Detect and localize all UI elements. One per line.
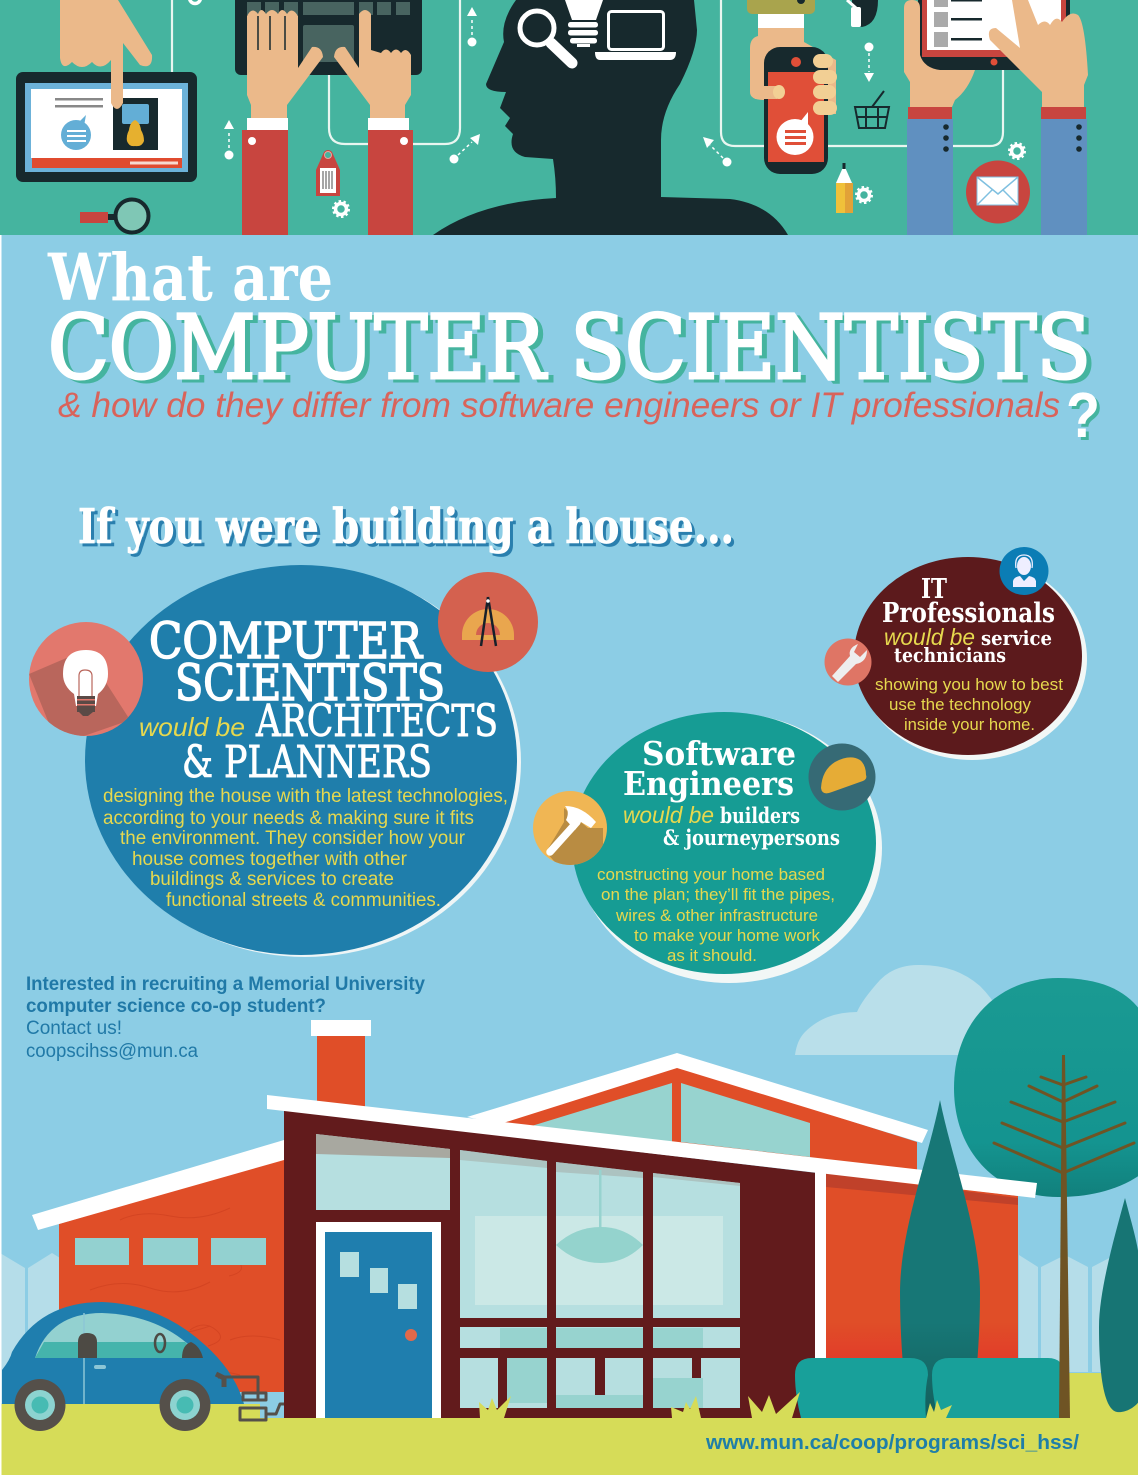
icon: wrench — [824, 638, 872, 686]
heading: computer scientists: SCIENTISTS — [175, 654, 445, 712]
icon: shopping basket — [855, 91, 889, 128]
text: description: the environment. They consider how your — [120, 828, 466, 849]
text: description — [103, 786, 508, 911]
contact block: coopscihss@mun.ca — [26, 1041, 198, 1062]
heading: computer scientists: COMPUTER — [149, 612, 423, 670]
panel: computer scientists — [29, 565, 538, 957]
text: description: designing the house with the latest technologies, — [103, 786, 508, 807]
heading: computer scientists — [149, 612, 445, 712]
text: description: to make your home work — [634, 926, 820, 945]
text: description: according to your needs & making sure it fits — [103, 808, 474, 829]
icon: typing hands and red sleeves — [242, 10, 413, 235]
right wing wall — [820, 1172, 1018, 1372]
main roof — [267, 1095, 1037, 1198]
chimney — [311, 1020, 371, 1114]
text: description — [875, 675, 1063, 734]
house — [32, 1020, 1037, 1418]
icon: tablet hands and blue sleeves — [904, 0, 1088, 235]
text: would be service technicians: service — [981, 626, 1052, 650]
icon: magnifying glass — [80, 200, 148, 232]
icon: gear by envelope — [1009, 143, 1025, 159]
icon: support agent — [1000, 547, 1048, 595]
garage wing — [32, 1140, 290, 1392]
round tree — [954, 978, 1140, 1197]
icon: pencil — [836, 163, 853, 213]
car — [2, 1302, 244, 1431]
contact block: computer science co-op student? — [26, 996, 326, 1017]
wheels — [14, 1379, 210, 1431]
pendant lamp — [556, 1170, 643, 1263]
dashed arrows — [224, 7, 874, 166]
icon: gear top — [190, 0, 200, 4]
charging cable — [216, 1374, 284, 1420]
cypress trees — [900, 1100, 1140, 1418]
url: www.mun.ca/coop/programs/sci_hss/ — [705, 1432, 1079, 1454]
text: description: showing you how to best — [875, 675, 1063, 694]
title — [47, 240, 1103, 454]
heading: software engineers: Engineers — [623, 764, 794, 803]
bare tree — [994, 1055, 1134, 1418]
question mark: ? — [1069, 382, 1103, 454]
heading: if you were building a house: If you were building a house... — [81, 502, 737, 558]
text: description: wires & other infrastructure — [615, 906, 818, 925]
ground — [0, 1373, 1140, 1475]
text: would be builders: builders — [720, 803, 800, 828]
text: description: functional streets & communities. — [166, 890, 441, 911]
heading: if you were building a house: If you were building a house... — [78, 499, 734, 555]
text: would be architects and planners: & PLANNERS — [182, 737, 432, 788]
heading: IT professionals: Professionals — [882, 598, 1055, 629]
transom window — [316, 1134, 450, 1210]
icon: hand holding phone — [747, 0, 837, 174]
icon: right tablet — [918, 0, 1070, 70]
icon: head silhouette — [433, 0, 788, 235]
icon: price tag — [316, 150, 340, 196]
grass tufts — [479, 1392, 952, 1418]
heading: IT professionals — [882, 574, 1055, 629]
icon: hard hat — [808, 744, 876, 810]
text: would be architects and planners: ARCHITECTS — [255, 696, 498, 747]
panel: software engineers — [533, 712, 882, 983]
heading: IT professionals: IT — [921, 574, 947, 605]
icon: hammer — [533, 791, 607, 868]
hedges — [795, 1358, 1064, 1418]
icon: light bulb — [29, 622, 143, 736]
text: description: on the plan; they’ll fit the pipes, — [601, 885, 835, 904]
icon: gear — [333, 201, 349, 217]
question mark: ? — [1066, 379, 1100, 451]
text: description: constructing your home based — [597, 865, 825, 884]
icon: left tablet — [16, 72, 197, 182]
heading: software engineers — [623, 734, 796, 803]
main dark block — [284, 1110, 817, 1418]
text: would be architects and planners: would be — [139, 712, 245, 742]
title: what are: What are — [47, 240, 333, 316]
subtitle: & how do they differ from software engineers or IT professionals — [58, 386, 1060, 425]
text: description: inside your home. — [904, 715, 1035, 734]
icon: gear by pencil — [856, 187, 872, 203]
contact block: Contact us! — [26, 1018, 122, 1039]
circuit lines — [172, 0, 1003, 146]
icon: idea symbols in head — [520, 0, 676, 63]
text: description — [597, 865, 835, 965]
panel: IT professionals — [824, 547, 1087, 760]
icon: telephone handset — [847, 0, 878, 27]
text: description: house comes together with other — [132, 849, 408, 870]
fences — [0, 1253, 1138, 1403]
cloud — [795, 965, 998, 1055]
icon: envelope — [966, 160, 1030, 224]
text: description: as it should. — [667, 946, 757, 965]
text: would be builders: & journeypersons — [663, 825, 840, 850]
white post — [815, 1172, 826, 1362]
contact block: Interested in recruiting a Memorial University — [26, 974, 425, 995]
text: description: use the technology — [889, 695, 1031, 714]
text: description: buildings & services to create — [150, 869, 394, 890]
text: would be builders — [623, 802, 840, 850]
rear gable — [467, 1053, 928, 1175]
text: would be service technicians — [884, 624, 1052, 667]
top illustration banner — [0, 0, 1140, 235]
contact block — [26, 974, 425, 1062]
icon: keyboard — [235, 0, 422, 75]
text: would be service technicians: would be — [884, 624, 975, 650]
heading: software engineers: Software — [642, 734, 796, 773]
text: would be architects and planners — [139, 696, 498, 788]
text: would be builders: would be — [623, 802, 714, 828]
picture windows — [460, 1150, 740, 1408]
icon: pointing hand — [60, 0, 152, 109]
text: would be service technicians: technicians — [894, 643, 1006, 667]
icon: compass and protractor — [438, 572, 538, 672]
front door — [316, 1222, 441, 1418]
